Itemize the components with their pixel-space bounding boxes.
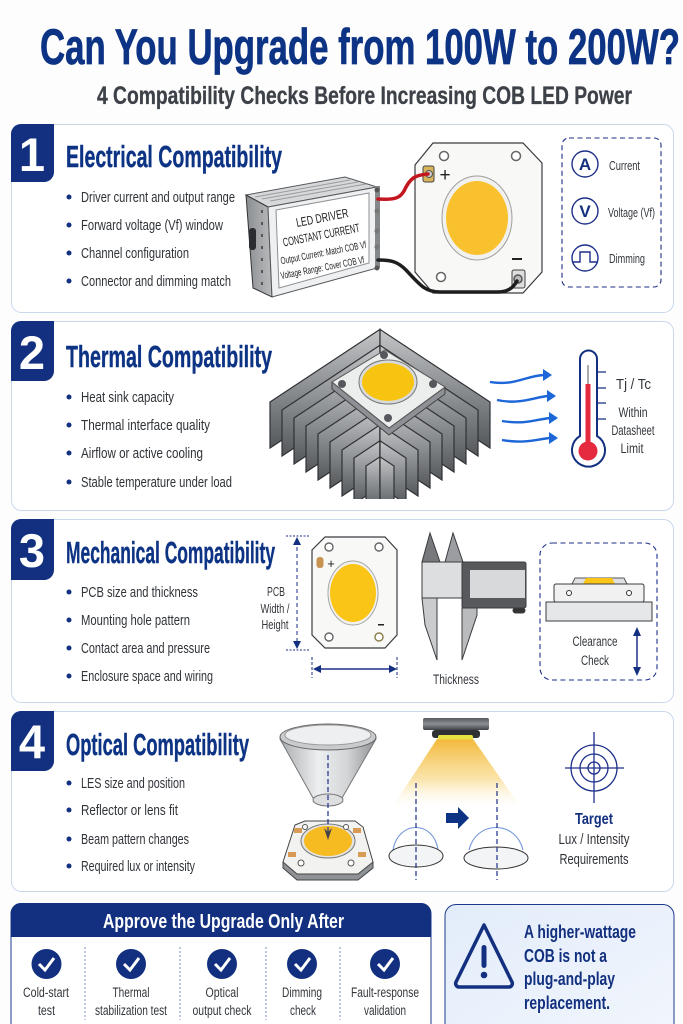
- illustration: LED driver box: Output Current: Match COB Vf: [280, 240, 367, 267]
- number tab 4: 4: [19, 715, 45, 768]
- number tab 4: [11, 711, 54, 771]
- icon: target: [565, 732, 624, 803]
- icon: dimming pulse: [572, 245, 598, 271]
- bullet list: electrical: Connector and dimming match: [81, 274, 231, 290]
- callout: clearance check: Clearance: [572, 634, 618, 649]
- bullet list: electrical: Channel configuration: [81, 246, 189, 262]
- check: cold-start test: [23, 949, 69, 1018]
- label: target requirements: Requirements: [560, 852, 628, 868]
- check: thermal stabilization test: [95, 949, 167, 1018]
- label: temperature limit: Datasheet: [612, 423, 655, 438]
- bullet list: electrical: Driver current and output range: [81, 190, 235, 206]
- icon: voltage: [572, 198, 598, 224]
- wires: [378, 174, 517, 292]
- warning text: A higher-wattage: [524, 921, 636, 942]
- number tab 1: 1: [19, 128, 45, 181]
- illustration: beam spot comparison: [389, 783, 528, 880]
- illustration: heat sink with COB: [270, 329, 490, 512]
- heading: electrical: Electrical Compatibility: [66, 139, 282, 174]
- check: dimming check: Dimming: [282, 985, 322, 1000]
- number tab 3: [11, 519, 54, 580]
- callout: clearance check: [540, 543, 657, 680]
- warning text: plug-and-play: [524, 968, 616, 989]
- callout: clearance check: Check: [581, 653, 609, 668]
- icon: current: [572, 151, 598, 177]
- label: temperature limit: [612, 376, 655, 456]
- check: fault-response validation: validation: [364, 1003, 406, 1018]
- bullet list: electrical: Forward voltage (Vf) window: [81, 218, 223, 234]
- warning text: replacement.: [524, 992, 610, 1013]
- heading: thermal: Thermal Compatibility: [66, 339, 272, 374]
- number tab 2: 2: [19, 326, 45, 379]
- legend: current, voltage, dimming: Dimming: [609, 252, 645, 266]
- illustration: COB board top view: +: [327, 556, 335, 571]
- illustration: COB LED module: [415, 143, 542, 293]
- icon: current: A: [579, 155, 591, 174]
- bullet list: thermal: [66, 390, 232, 491]
- warning text: COB is not a: [524, 945, 608, 966]
- bullet list: thermal: Heat sink capacity: [81, 390, 175, 406]
- check: cold-start test: test: [38, 1003, 55, 1018]
- warning text: [524, 921, 636, 1013]
- illustration: lamp beam: [393, 718, 520, 806]
- bullet list: mechanical: Mounting hole pattern: [81, 613, 190, 629]
- number tab 1: [11, 124, 54, 182]
- label: temperature limit: Limit: [620, 441, 644, 456]
- bullet list: optical: Beam pattern changes: [81, 832, 189, 848]
- bullet list: optical: [66, 776, 196, 875]
- legend: current, voltage, dimming: [562, 138, 661, 287]
- illustration: COB LED module: +: [439, 165, 451, 186]
- icon: warning triangle: [456, 925, 512, 987]
- panel: thermal compatibility: [11, 321, 674, 512]
- dimension: PCB height: [260, 536, 310, 650]
- arrow: beam change: [446, 807, 469, 829]
- check: dimming check: check: [290, 1003, 316, 1018]
- dimension: PCB width: [312, 657, 397, 678]
- bullet list: mechanical: [66, 585, 213, 685]
- label: temperature limit: Within: [618, 405, 648, 420]
- label: target requirements: [558, 811, 630, 868]
- check: thermal stabilization test: Thermal: [112, 985, 150, 1000]
- label: target requirements: Lux / Intensity: [558, 832, 630, 848]
- legend: current, voltage, dimming: Current: [609, 159, 640, 173]
- check: optical output check: [192, 949, 252, 1018]
- icon: voltage: V: [579, 202, 591, 221]
- banner heading: Approve the Upgrade Only After: [103, 911, 344, 933]
- label: thickness: Thickness: [433, 672, 479, 687]
- check: optical output check: Optical: [206, 985, 238, 1000]
- bullet list: mechanical: Enclosure space and wiring: [81, 669, 213, 685]
- check: optical output check: output check: [192, 1003, 252, 1018]
- panel: approve the upgrade: [11, 903, 431, 1024]
- illustration: LED driver box: Voltage Range: Cover COB Vf: [280, 255, 365, 282]
- bullet list: optical: LES size and position: [81, 776, 185, 792]
- bullet list: mechanical: Contact area and pressure: [81, 641, 210, 657]
- number tab 2: [11, 321, 54, 381]
- label: temperature limit: Tj / Tc: [616, 376, 651, 393]
- check: dimming check: [282, 949, 322, 1018]
- heading: optical: Optical Compatibility: [66, 727, 249, 762]
- dimension: PCB height: Height: [262, 617, 289, 632]
- arrows: airflow: [490, 369, 558, 444]
- check: cold-start test: Cold-start: [23, 985, 69, 1000]
- illustration: COB board top view: [312, 537, 397, 648]
- illustration: LED driver box: [246, 177, 380, 297]
- check: fault-response validation: [351, 949, 419, 1018]
- legend: current, voltage, dimming: Voltage (Vf): [608, 206, 655, 220]
- heading: mechanical: Mechanical Compatibility: [66, 535, 275, 570]
- panel: mechanical compatibility: [11, 519, 674, 702]
- bullet list: electrical: [66, 190, 235, 290]
- callout: warning: [445, 904, 674, 1024]
- banner heading: [11, 903, 431, 937]
- panel: electrical compatibility: [11, 124, 674, 312]
- icon: thermometer: [572, 350, 606, 467]
- illustration: LED driver box: LED DRIVER: [295, 206, 350, 230]
- check: fault-response validation: Fault-response: [351, 985, 419, 1000]
- illustration: reflector over COB: [280, 724, 376, 880]
- check: thermal stabilization test: stabilization test: [95, 1003, 167, 1018]
- bullet list: mechanical: PCB size and thickness: [81, 585, 198, 601]
- bullet list: optical: Reflector or lens fit: [81, 803, 178, 819]
- number tab 3: 3: [19, 524, 45, 577]
- bullet list: thermal: Airflow or active cooling: [81, 446, 203, 462]
- bullet list: thermal: Thermal interface quality: [81, 418, 211, 434]
- panel: optical compatibility: [11, 711, 674, 892]
- illustration: LED driver box: CONSTANT CURRENT: [282, 221, 361, 249]
- dimension: PCB height: Width /: [260, 601, 290, 616]
- illustration: caliper: [422, 533, 526, 660]
- bullet list: optical: Required lux or intensity: [81, 859, 196, 875]
- dimension: PCB height: PCB: [267, 584, 285, 599]
- bullet list: thermal: Stable temperature under load: [81, 475, 232, 491]
- label: target requirements: Target: [575, 811, 613, 828]
